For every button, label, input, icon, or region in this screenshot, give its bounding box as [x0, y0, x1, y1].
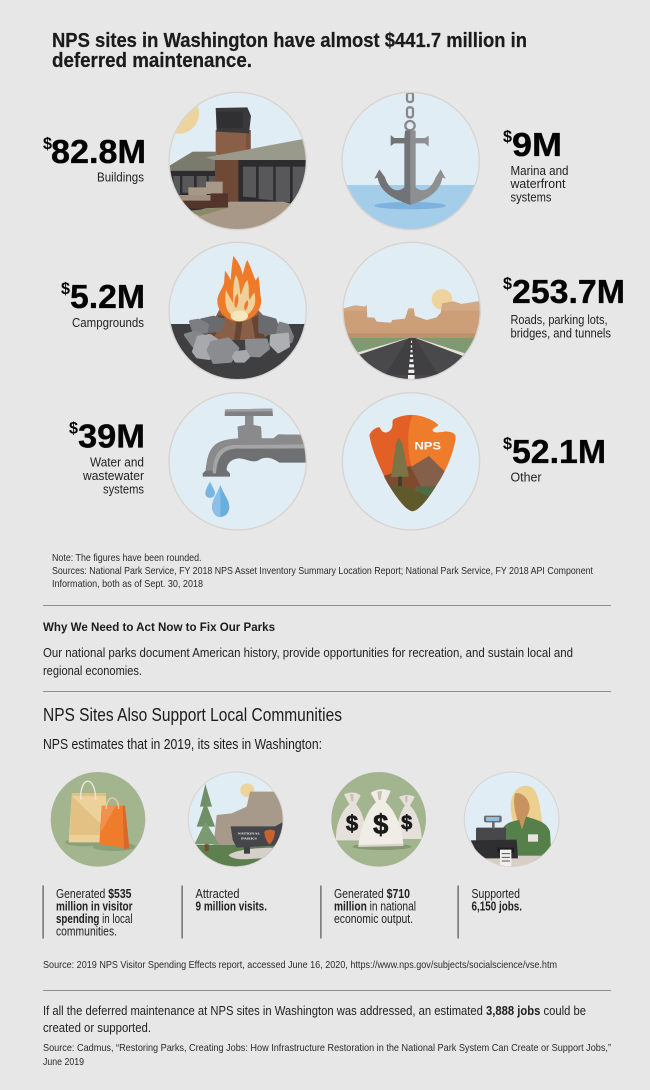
stat: jobs: [458, 886, 522, 938]
stat: jobs: 6,150 jobs.: [472, 900, 522, 914]
stat: campgrounds $5.2M: [61, 278, 145, 330]
stat: buildings $82.8M: [43, 133, 146, 184]
intro text: NPS estimates that in 2019, its sites in Washington:: [43, 736, 322, 753]
stat: other $52.1M: 52.1M: [512, 433, 606, 470]
stat: roads $253.7M: Roads, parking lots,: [510, 313, 608, 327]
text block: why act now: [43, 645, 573, 678]
stat: water $39M: $: [69, 418, 79, 438]
heading: why act now: Why We Need to Act Now to Fix Our Parks: [43, 620, 275, 634]
stat: marina $9M: Marina and: [510, 164, 569, 178]
source: Cadmus: [43, 1042, 611, 1068]
stat: buildings $82.8M: $: [43, 134, 53, 153]
stat: visitor spending: [42, 886, 133, 938]
icon: money bags: $: [373, 809, 388, 840]
stat: economic output: [320, 886, 416, 938]
note and sources: Note: The figures have been rounded.: [52, 552, 202, 564]
stat: other $52.1M: [503, 433, 606, 484]
icon: national park sign: NATIONAL: [238, 831, 261, 835]
source: Cadmus: June 2019: [43, 1056, 84, 1068]
icon: national park sign: PARKS: [241, 837, 257, 841]
text block: why act now: Our national parks document American history, provide opportunities for recreation, and sustain local and: [43, 645, 573, 660]
stat: water $39M: 39M: [78, 418, 145, 454]
stat: economic output: million in national: [334, 900, 416, 914]
icon: road: [342, 242, 482, 383]
stat: visitor spending: Generated $535: [56, 887, 132, 901]
stat: visitor spending: spending in local: [56, 912, 132, 926]
title: deferred maintenance.: [52, 50, 252, 72]
stat: visitor spending: million in visitor: [56, 900, 133, 914]
stat: marina $9M: [503, 126, 569, 204]
text block: jobs created: [43, 1003, 586, 1035]
stat: buildings $82.8M: 82.8M: [51, 133, 146, 170]
icon: money bags: $: [346, 811, 358, 836]
stat: water $39M: systems: [103, 482, 144, 496]
text block: jobs created: created or supported.: [43, 1020, 151, 1035]
icon: NPS arrowhead: NPS: [414, 440, 442, 452]
text block: why act now: regional economies.: [43, 663, 142, 678]
stat: roads $253.7M: $: [503, 274, 513, 293]
stat: water $39M: [69, 418, 145, 496]
stat: buildings $82.8M: Buildings: [97, 170, 144, 184]
stat: visits: Attracted: [196, 887, 240, 901]
icon: NPS arrowhead: [342, 393, 480, 530]
stat: visitor spending: communities.: [56, 924, 117, 938]
stat: marina $9M: waterfront: [510, 177, 566, 191]
stat: water $39M: Water and: [90, 456, 144, 470]
stat: economic output: economic output.: [334, 912, 413, 926]
icon: cashier: [464, 772, 560, 867]
note and sources: [52, 552, 593, 590]
stat: water $39M: wastewater: [82, 469, 144, 483]
icon: anchor: [338, 92, 485, 232]
icon: shopping bags: [51, 772, 145, 867]
stat: marina $9M: systems: [510, 190, 552, 204]
icon: national park sign: [187, 772, 284, 868]
stat: campgrounds $5.2M: Campgrounds: [72, 316, 144, 330]
icon: money bags: [331, 772, 426, 867]
text block: jobs created: If all the deferred maintenance at NPS sites in Washington was addressed, an estimated 3,888 jobs could be: [43, 1003, 586, 1018]
stat: roads $253.7M: [503, 273, 625, 340]
icon: building: [159, 92, 308, 233]
note and sources: Information, both as of Sept. 30, 2018: [52, 578, 203, 590]
stat: marina $9M: 9M: [512, 126, 562, 163]
stat: other $52.1M: $: [503, 434, 513, 453]
stat: roads $253.7M: bridges, and tunnels: [510, 326, 611, 340]
icon: faucet: [169, 393, 310, 530]
icon: campfire: [167, 242, 310, 384]
stat: other $52.1M: Other: [510, 470, 542, 484]
stat: jobs: Supported: [472, 887, 520, 901]
source: visitor spending: Source: 2019 NPS Visitor Spending Effects report, accessed June 16, 2020, https://www.nps.gov/subjects/socialscience/vse.htm: [43, 959, 557, 971]
title: [52, 30, 527, 72]
stat: visits: 9 million visits.: [196, 900, 267, 914]
title: NPS sites in Washington have almost $441.7 million in: [52, 30, 527, 52]
stat: marina $9M: $: [503, 127, 513, 146]
heading: local communities: NPS Sites Also Support Local Communities: [43, 705, 342, 725]
stat: economic output: Generated $710: [334, 887, 410, 901]
stat: campgrounds $5.2M: $: [61, 279, 71, 298]
stat: roads $253.7M: 253.7M: [512, 273, 625, 310]
stat: visits: [182, 886, 267, 938]
stat: campgrounds $5.2M: 5.2M: [70, 278, 145, 315]
icon: money bags: $: [401, 813, 412, 835]
